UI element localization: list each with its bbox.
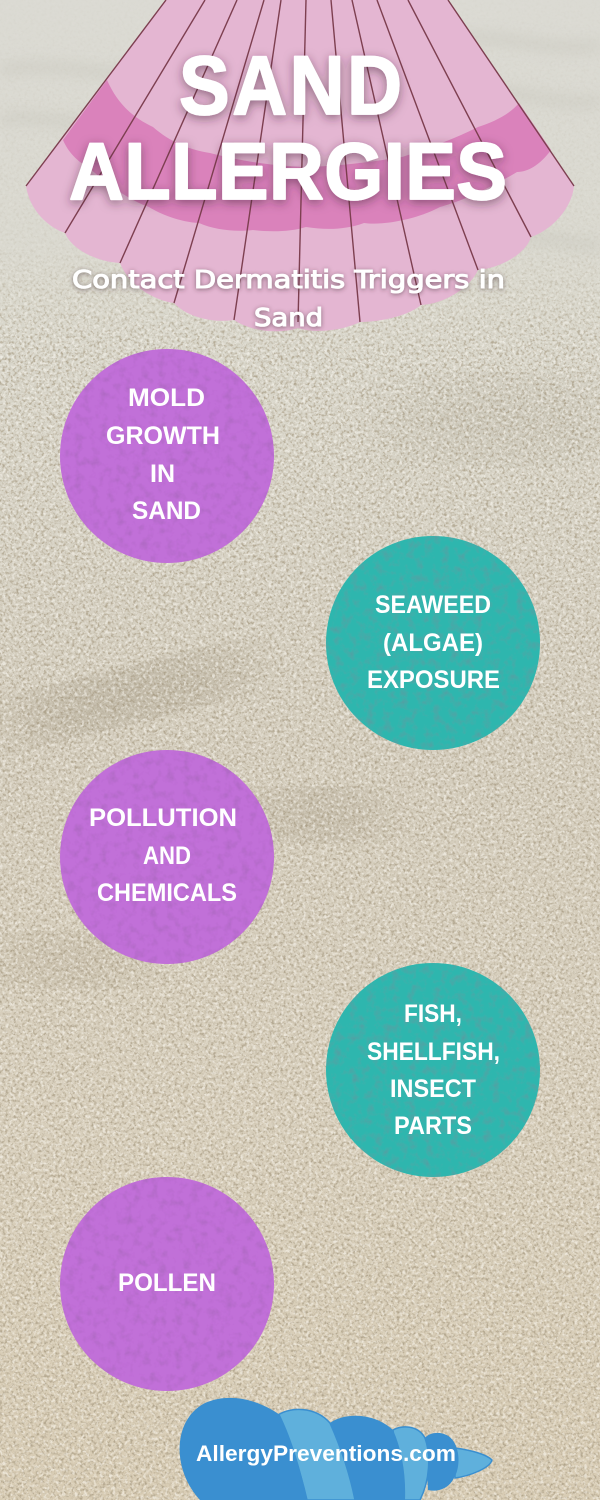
whorl three xyxy=(330,1416,405,1500)
whorl two xyxy=(278,1409,355,1500)
whorl four xyxy=(393,1427,429,1500)
shell ribs xyxy=(26,0,574,322)
title xyxy=(69,39,507,216)
shell pink band xyxy=(63,80,551,231)
circle: mold growth in sand: SAND xyxy=(132,497,201,525)
circle: pollen xyxy=(60,1177,274,1391)
circle: seaweed algae exposure: EXPOSURE xyxy=(367,666,500,694)
circle: pollen: POLLEN xyxy=(118,1269,216,1297)
circle: fish, shellfish, insect parts xyxy=(326,963,540,1177)
whorl five xyxy=(425,1433,458,1491)
subtitle xyxy=(72,265,505,332)
conch shell footer xyxy=(180,1398,492,1500)
shell tip xyxy=(455,1448,492,1478)
circle: pollution and chemicals: POLLUTION xyxy=(89,804,237,832)
circle: fish, shellfish, insect parts: PARTS xyxy=(394,1112,472,1140)
whorl one xyxy=(180,1398,307,1500)
circle: mold growth in sand: GROWTH xyxy=(106,422,220,450)
circle: fish, shellfish, insect parts: FISH, xyxy=(404,1000,462,1028)
subtitle: Sand xyxy=(254,303,323,332)
circle: seaweed algae exposure xyxy=(326,536,540,750)
subtitle: Contact Dermatitis Triggers in xyxy=(72,265,505,294)
scallop shell xyxy=(26,0,574,331)
title: SAND xyxy=(179,39,402,132)
circle: mold growth in sand: MOLD xyxy=(128,384,205,412)
circle: fish, shellfish, insect parts: SHELLFISH, xyxy=(367,1038,500,1066)
circle: pollution and chemicals: AND xyxy=(143,842,191,870)
title: ALLERGIES xyxy=(69,126,507,216)
circle: mold growth in sand xyxy=(60,349,274,563)
circle: seaweed algae exposure: (ALGAE) xyxy=(383,629,483,657)
shell body xyxy=(26,0,574,331)
circle: seaweed algae exposure: SEAWEED xyxy=(375,591,491,619)
circle: pollution and chemicals xyxy=(60,750,274,964)
circle: mold growth in sand: IN xyxy=(150,460,175,488)
circle: pollution and chemicals: CHEMICALS xyxy=(97,879,237,907)
circle: fish, shellfish, insect parts: INSECT xyxy=(390,1075,476,1103)
website label: AllergyPreventions.com xyxy=(196,1441,456,1466)
